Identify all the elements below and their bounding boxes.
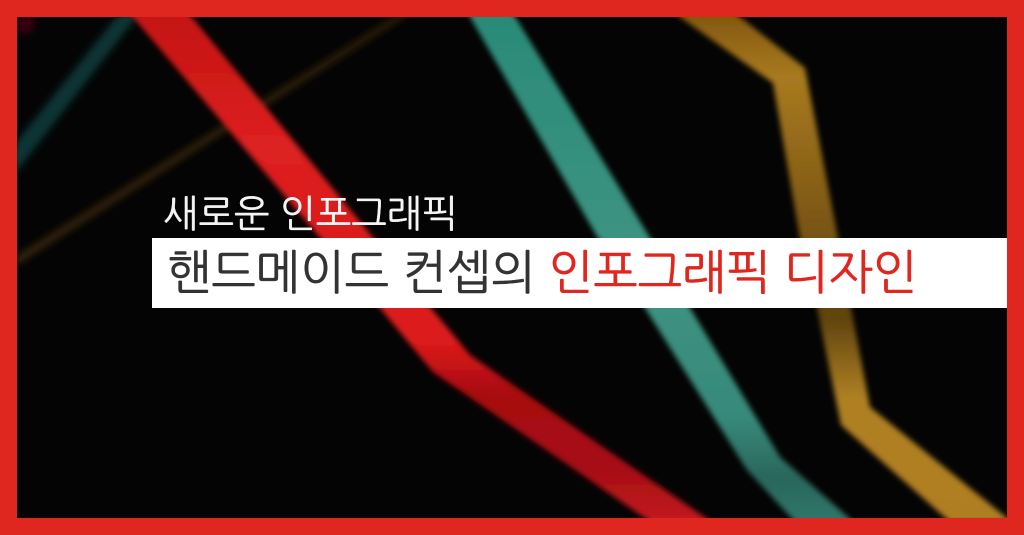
red ribbon bbox=[127, 10, 716, 525]
teal ribbon bbox=[466, 10, 857, 525]
thin amber ribbon bbox=[14, 14, 408, 266]
main title: 핸드메이드 컨셉의 인포그래픽 디자인 bbox=[167, 249, 917, 296]
dim teal ribbon bbox=[10, 10, 142, 180]
subtitle: 새로운 인포그래픽 bbox=[163, 196, 458, 233]
white title band bbox=[152, 238, 1007, 308]
gold ribbon bbox=[670, 10, 1012, 522]
dim red corner glow bbox=[15, 14, 35, 34]
